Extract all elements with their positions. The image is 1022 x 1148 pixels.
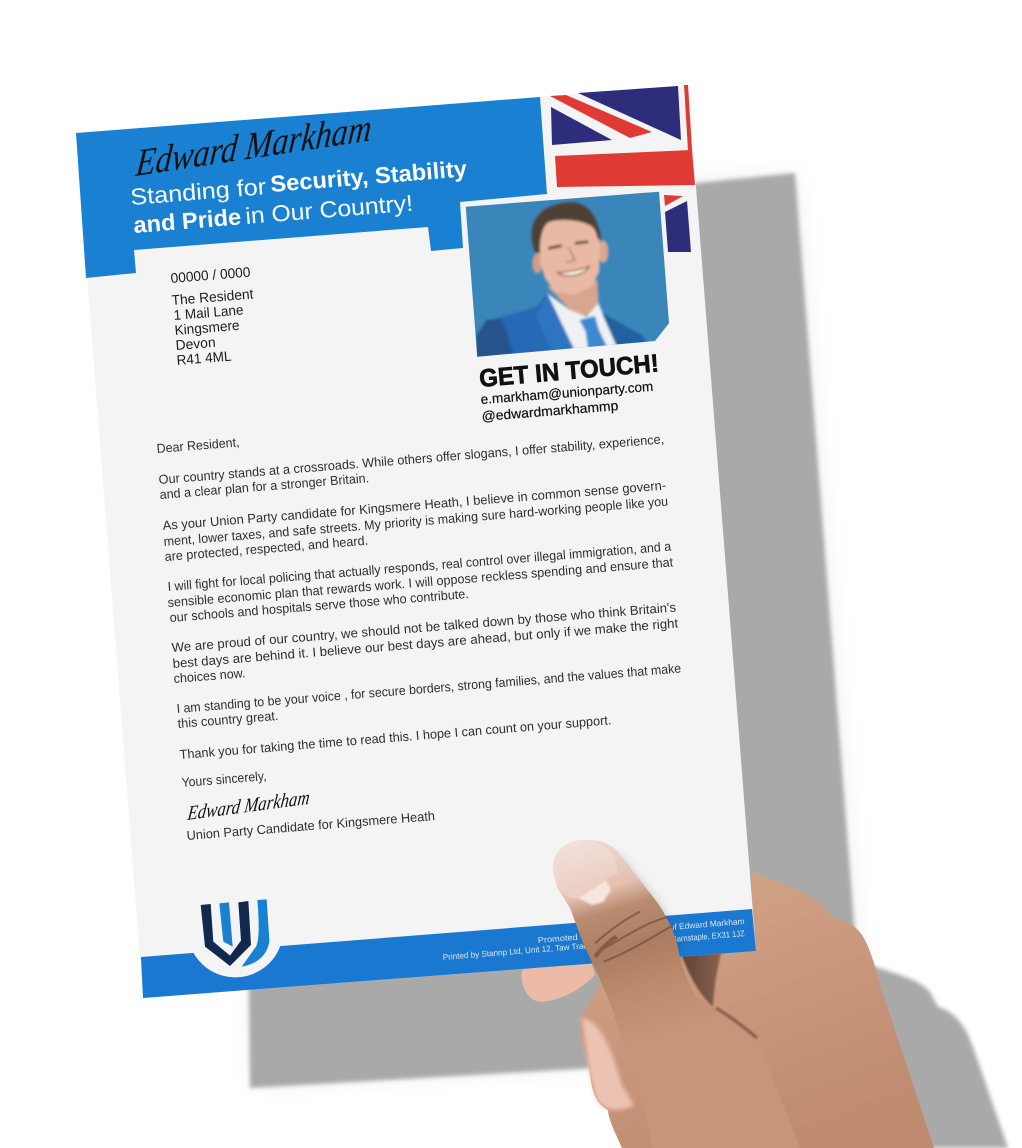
paper shadow <box>240 173 870 1088</box>
flag lower navy <box>665 201 691 252</box>
letter body: are protected, respected, and heard. <box>164 533 369 564</box>
letter body: best days are behind it. I believe our best days are ahead, but only if we make the right <box>172 615 679 671</box>
headline: Security, Stability <box>269 155 468 197</box>
red right edge <box>684 85 692 150</box>
letter body: ment, lower taxes, and safe streets. My priority is making sure hard-working people like you <box>163 493 669 549</box>
smile <box>558 266 589 276</box>
letter body: As your Union Party candidate for Kingsmere Heath, I believe in common sense govern- <box>162 478 667 533</box>
footer imprint <box>442 916 745 962</box>
address block: 1 Mail Lane <box>173 301 244 323</box>
letter body: I will fight for local policing that actually responds, real control over illegal immigration, and a <box>167 538 672 594</box>
red diagonal <box>550 95 652 138</box>
address block <box>170 264 254 368</box>
letter body: We are proud of our country, we should not be talked down by those who think Britain's <box>171 599 677 655</box>
thumb shadow on paper <box>610 850 680 960</box>
letter body: I am standing to be your voice , for secure borders, strong families, and the values that make <box>176 660 682 716</box>
red horizontal band <box>555 150 695 187</box>
letter body: our schools and hospitals serve those who contribute. <box>169 586 469 625</box>
headline: Standing for <box>129 173 267 210</box>
knuckle creases <box>595 912 673 962</box>
headline: in Our Country! <box>244 190 414 229</box>
headline: and Pride <box>132 203 242 238</box>
soft shadow glow <box>250 173 860 1085</box>
hand behind the letter <box>521 872 934 1148</box>
thumb shape <box>553 840 800 1148</box>
thumb <box>553 840 800 1148</box>
blue footer band <box>141 909 756 998</box>
suit left <box>492 294 568 356</box>
suit sleeve <box>475 318 513 358</box>
address block: The Resident <box>171 285 254 308</box>
logo <box>193 899 281 977</box>
letter body: sensible economic plan that rewards work. I will oppose reckless spending and ensure that <box>167 554 674 610</box>
letter body: this country great. <box>177 708 279 731</box>
address block: R41 4ML <box>176 348 232 368</box>
letter body: Our country stands at a crossroads. While others offer slogans, I offer stability, experience, <box>158 431 665 487</box>
hair <box>532 202 601 253</box>
palm crease <box>716 1008 757 1038</box>
letter body: Thank you for taking the time to read this. I hope I can count on your support. <box>179 712 612 762</box>
contact details <box>480 379 654 424</box>
tie <box>579 316 607 349</box>
shirt <box>547 293 618 350</box>
logo blue right <box>242 899 269 967</box>
letter body: Dear Resident, <box>156 434 240 456</box>
address block: Kingsmere <box>174 317 240 338</box>
hand shadow <box>870 965 1008 1148</box>
candidate name: Edward Markham <box>133 107 373 185</box>
footer imprint: Barnstaple, EX31 1JZ <box>671 928 745 944</box>
flag lower red corner <box>664 195 683 206</box>
flag <box>550 85 695 252</box>
headline <box>129 155 468 238</box>
blue header banner <box>76 97 547 278</box>
address block: 00000 / 0000 <box>170 264 251 286</box>
thumb nail <box>553 840 618 898</box>
lower finger highlight <box>582 1018 634 1110</box>
shadow between thumb and hand <box>680 945 723 1007</box>
neck <box>547 280 599 317</box>
signature title: Union Party Candidate for Kingsmere Heath <box>186 808 435 843</box>
logo blue centre <box>219 902 233 947</box>
signature: Edward Markham <box>186 787 311 825</box>
face <box>539 218 600 295</box>
candidate portrait <box>466 192 669 357</box>
address block: Devon <box>175 334 216 353</box>
letter body: Yours sincerely, <box>181 768 267 790</box>
letter body: choices now. <box>173 665 246 686</box>
ears <box>532 253 542 274</box>
letter sheet <box>76 85 756 998</box>
footer imprint: of Edward Markham <box>669 916 745 932</box>
suit right <box>602 313 647 347</box>
logo white roundel <box>193 930 281 977</box>
navy triangle right <box>578 86 681 140</box>
logo dark mark <box>201 901 251 966</box>
lapel <box>537 298 572 350</box>
contact details: @edwardmarkhammp <box>481 398 619 424</box>
contact heading: GET IN TOUCH! <box>478 349 660 393</box>
letter body: and a clear plan for a stronger Britain. <box>159 470 370 502</box>
footer imprint: Promoted <box>537 932 578 945</box>
footer imprint: Printed by Stannp Ltd, Unit 12, Taw Trade <box>442 940 593 962</box>
navy triangle left <box>551 107 612 145</box>
contact details: e.markham@unionparty.com <box>480 379 654 407</box>
nail highlight <box>578 880 611 905</box>
paper <box>76 85 756 998</box>
back of hand <box>580 872 934 1148</box>
index finger <box>521 958 595 1002</box>
letter body <box>156 431 682 790</box>
nose shadow <box>566 247 575 262</box>
eyes <box>548 242 588 248</box>
